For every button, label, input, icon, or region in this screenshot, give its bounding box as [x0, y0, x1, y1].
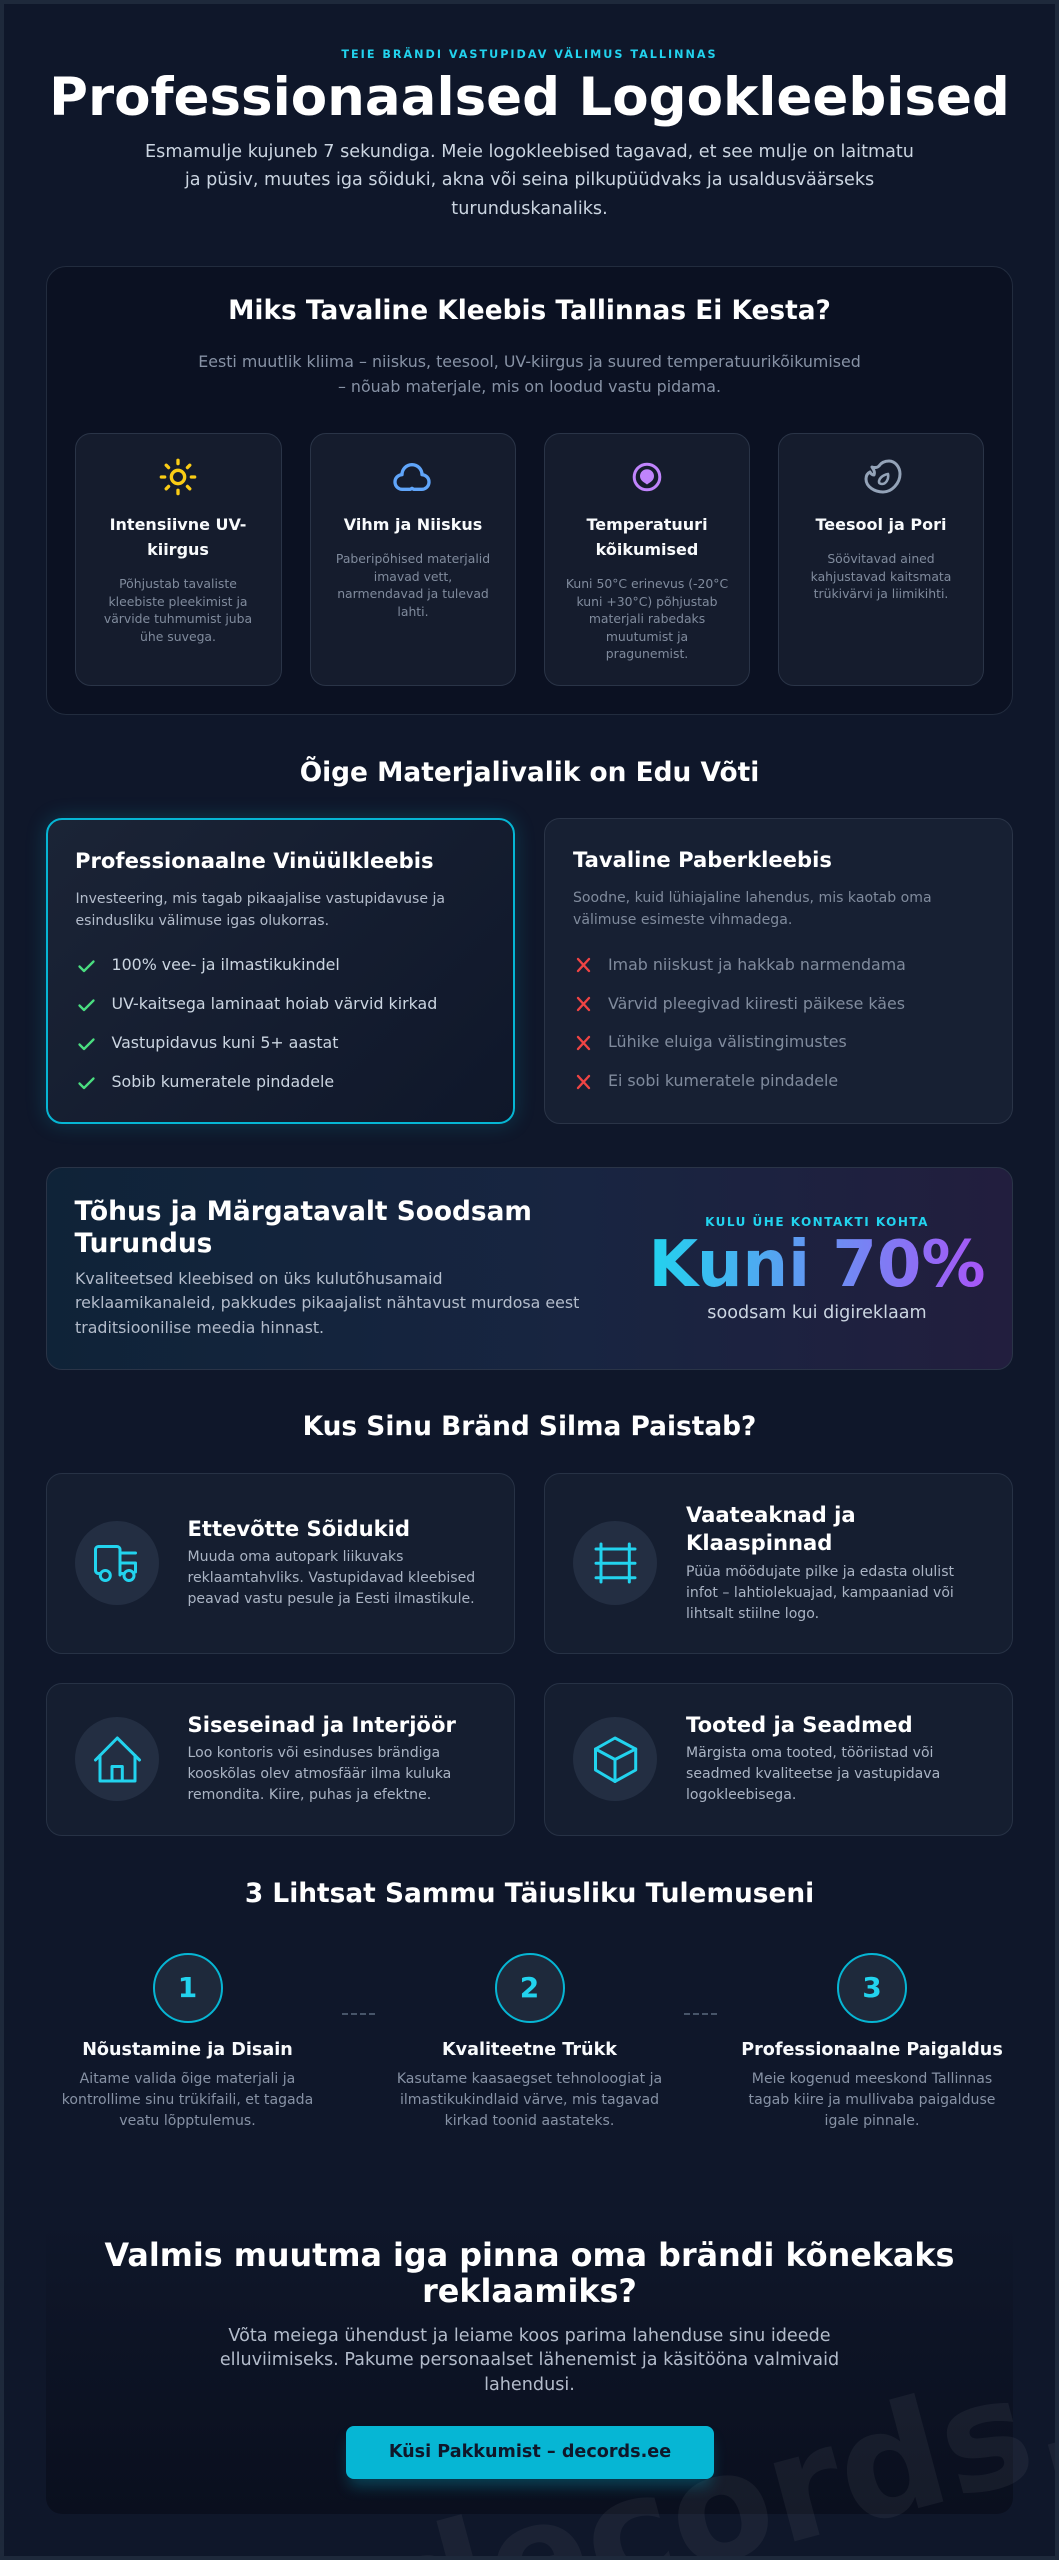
card: rain	[310, 433, 516, 686]
intro text: ja püsiv, muutes iga sõiduki, akna või seina pilkupüüdvaks ja usaldusväärseks	[185, 170, 874, 190]
section heading: materials: Õige Materjalivalik on Edu Võti	[300, 756, 759, 788]
card text	[188, 1744, 451, 1803]
panel: why ordinary stickers fail	[46, 266, 1013, 715]
card text: Püüa möödujate pilke ja edasta olulist	[686, 1564, 954, 1580]
paper heading: Tavaline Paberkleebis	[573, 847, 832, 872]
card text: Loo kontoris või esinduses brändiga	[188, 1744, 440, 1760]
card text: peavad vastu pesule ja Eesti ilmastikule.	[188, 1591, 475, 1607]
card text: UV: kleebiste pleekimist ja	[108, 594, 248, 609]
card text: infot – lahtiolekuajad, kampaaniad või	[686, 1585, 954, 1601]
list text 1: Imab niiskust ja hakkab narmendama	[608, 955, 906, 974]
vinyl heading: Professionaalne Vinüülkleebis	[75, 848, 434, 873]
step 2 number: 2	[520, 1971, 539, 2004]
banner text	[75, 1268, 579, 1337]
CTA button	[346, 2426, 714, 2479]
intro text	[145, 142, 914, 219]
cross item 1	[576, 958, 590, 972]
CTA button: Küsi Pakkumist – decords.ee	[389, 2442, 671, 2462]
paper text: välimuse esimeste vihmadega.	[573, 912, 792, 928]
paper text	[573, 890, 932, 928]
list text 3: Lühike eluiga välistingimustes	[608, 1032, 847, 1051]
card text: UV	[104, 576, 252, 644]
connector 2	[684, 2013, 717, 2015]
card text: UV: Põhjustab tavaliste	[119, 576, 237, 591]
CTA text: lahendusi.	[484, 2375, 575, 2395]
cross item 4	[576, 1074, 590, 1090]
connector 1	[342, 2013, 375, 2015]
section heading: where: Kus Sinu Bränd Silma Paistab?	[303, 1411, 756, 1442]
CTA heading: reklaamiks?	[422, 2273, 637, 2310]
cross item 2	[576, 996, 590, 1012]
card text: rain: imavad vett,	[374, 569, 452, 584]
step 3 text	[702, 2068, 1042, 2132]
stat value: Kuni 70%	[648, 1228, 986, 1302]
stat label: KULU ÜHE KONTAKTI KOHTA	[705, 1215, 929, 1229]
card title: UV: kiirgus	[147, 540, 209, 558]
icon: house	[94, 1736, 142, 1782]
banner heading: Turundus	[74, 1228, 212, 1258]
CTA text: elluviimiseks. Pakume personaalset lähenemist ja käsitööna valmivaid	[220, 2350, 839, 2370]
step 1 title: Nõustamine ja Disain	[82, 2040, 293, 2060]
card: products	[544, 1682, 1013, 1836]
CTA heading: Valmis muutma iga pinna oma brändi kõnekaks	[105, 2237, 954, 2274]
card text	[686, 1564, 954, 1622]
list text 4: Sobib kumeratele pindadele	[112, 1072, 334, 1091]
card text	[188, 1548, 475, 1607]
step 1 text: Aitame valida õige materjali ja	[80, 2070, 295, 2086]
CTA text: Võta meiega ühendust ja leiame koos parima lahenduse sinu ideede	[228, 2326, 831, 2346]
icon: sun	[160, 458, 196, 496]
banner heading	[74, 1196, 532, 1258]
title: Professionaalsed Logokleebised	[49, 67, 1010, 128]
icon: box	[594, 1736, 638, 1783]
stat caption: soodsam kui digireklaam	[707, 1303, 927, 1323]
icon circle	[573, 1717, 657, 1801]
card: vehicles	[46, 1472, 515, 1654]
card title: UV	[110, 514, 246, 558]
panel: vinyl	[46, 818, 515, 1124]
vinyl text	[76, 891, 445, 929]
card text: rain: lahti.	[397, 604, 429, 619]
step 3 text: tagab kiire ja mullivaba paigalduse	[749, 2092, 995, 2108]
list text 2: Värvid pleegivad kiiresti päikese käes	[608, 994, 905, 1012]
card: UV	[75, 433, 282, 686]
step 3 number	[837, 1953, 907, 2023]
banner text: traditsioonilise meedia hinnast.	[75, 1318, 324, 1337]
list text 3: Vastupidavus kuni 5+ aastat	[112, 1033, 338, 1052]
icon circle	[75, 1521, 159, 1605]
card text: road salt: Söövitavad ained	[827, 551, 935, 566]
card text: seadmed kvaliteetse ja vastupidava	[686, 1766, 940, 1782]
card text: logokleebisega.	[686, 1787, 796, 1803]
card title: UV: Intensiivne UV-	[110, 514, 246, 534]
card text: temperature: pragunemist.	[606, 646, 688, 661]
card text: road salt: trükivärvi ja liimikihti.	[814, 586, 948, 601]
card text: temperature: kuni +30°C) põhjustab	[576, 594, 718, 609]
icon: corrosion	[864, 460, 902, 494]
step 1 text	[62, 2070, 313, 2129]
banner heading: Tõhus ja Märgatavalt Soodsam	[74, 1196, 532, 1227]
check item 2	[78, 999, 95, 1012]
icon circle	[573, 1521, 657, 1605]
cross item 3	[576, 1036, 590, 1050]
list text 4: Ei sobi kumeratele pindadele	[608, 1071, 838, 1090]
card text: rain	[336, 551, 490, 619]
card text: UV: ühe suvega.	[140, 629, 216, 644]
card title: road salt: Teesool ja Pori	[816, 514, 946, 534]
eyebrow: TEIE BRÄNDI VASTUPIDAV VÄLIMUS TALLINNAS	[341, 48, 718, 61]
check item 1	[78, 960, 95, 972]
card text: temperature	[566, 576, 728, 661]
list text 2: UV-kaitsega laminaat hoiab värvid kirkad	[112, 994, 437, 1013]
card text: remondita. Kiire, puhas ja efektne.	[188, 1787, 431, 1803]
card text: kooskõlas olev atmosfäär ilma kuluka	[188, 1766, 451, 1782]
cross list: paper	[576, 955, 906, 1090]
list text 1: 100% vee- ja ilmastikukindel	[112, 955, 340, 974]
CTA heading	[0, 2238, 1059, 2310]
step 1 text: veatu lõpptulemus.	[119, 2113, 256, 2129]
intro text: Esmamulje kujuneb 7 sekundiga. Meie logokleebised tagavad, et see mulje on laitmatu	[145, 142, 914, 162]
check item 3	[78, 1038, 95, 1050]
check item 4	[78, 1077, 95, 1090]
card text: temperature: Kuni 50°C erinevus (-20°C	[566, 576, 728, 591]
step 1 text: kontrollime sinu trükifaili, et tagada	[62, 2092, 313, 2108]
vinyl text: esindusliku välimuse igas olukorras.	[76, 913, 329, 929]
card text: road salt	[811, 551, 951, 601]
card: road salt	[778, 433, 984, 686]
step 2 text: Kasutame kaasaegset tehnoloogiat ja	[397, 2070, 662, 2086]
card title: Tooted ja Seadmed	[686, 1712, 913, 1737]
step 2 text: kirkad toonid aastateks.	[445, 2113, 614, 2129]
card title: temperature	[586, 514, 708, 558]
card title: temperature: kõikumised	[596, 540, 698, 558]
panel intro	[198, 352, 861, 396]
panel heading: Miks Tavaline Kleebis Tallinnas Ei Kesta?	[228, 295, 831, 326]
panel intro: Eesti muutlik kliima – niiskus, teesool, UV-kiirgus ja suured temperatuurikõikumised	[198, 352, 861, 370]
vinyl text: Investeering, mis tagab pikaajalise vastupidavuse ja	[76, 891, 445, 907]
step 2 text: ilmastikukindlaid värve, mis tagavad	[400, 2092, 659, 2108]
card text: temperature: muutumist ja	[606, 629, 688, 644]
step 3 text: igale pinnale.	[825, 2113, 919, 2129]
CTA text	[0, 2324, 1059, 2397]
card text: rain: Paberipõhised materjalid	[336, 551, 490, 566]
card text: lihtsalt stiilne logo.	[686, 1606, 819, 1622]
section heading: steps: 3 Lihtsat Sammu Täiusliku Tulemuseni	[245, 1878, 814, 1909]
panel: call to action	[46, 2220, 1013, 2514]
card text: Märgista oma tooted, tööriistad või	[686, 1744, 933, 1760]
card title: Ettevõtte Sõidukid	[188, 1516, 410, 1541]
icon: temperature	[632, 462, 662, 492]
step 3 number: 3	[862, 1971, 882, 2004]
card text: Muuda oma autopark liikuvaks	[188, 1548, 403, 1564]
step 2 title: Kvaliteetne Trükk	[442, 2040, 617, 2060]
step 3 text: Meie kogenud meeskond Tallinnas	[752, 2070, 992, 2086]
icon: truck	[94, 1545, 137, 1582]
step 1 number: 1	[178, 1971, 197, 2004]
card title: Klaaspinnad	[686, 1530, 832, 1555]
banner text: reklaamikanaleid, pakkudes pikaajalist nähtavust murdosa eest	[75, 1293, 579, 1312]
banner text: Kvaliteetsed kleebised on üks kulutõhusamaid	[75, 1268, 443, 1288]
step 3 title: Professionaalne Paigaldus	[741, 2040, 1003, 2060]
panel: cost banner	[46, 1167, 1013, 1370]
icon: cloud	[393, 463, 431, 491]
card text: UV: värvide tuhmumist juba	[104, 611, 252, 626]
panel intro: – nõuab materjale, mis on loodud vastu pidama.	[338, 376, 721, 396]
card text: reklaamtahvliks. Vastupidavad kleebised	[188, 1570, 475, 1586]
check list: vinyl	[78, 955, 437, 1091]
card title: temperature: Temperatuuri	[586, 514, 708, 534]
paper text: Soodne, kuid lühiajaline lahendus, mis kaotab oma	[573, 890, 932, 906]
card title: rain: Vihm ja Niiskus	[344, 514, 482, 534]
step 1 number	[152, 1953, 222, 2023]
card text: road salt: kahjustavad kaitsmata	[811, 569, 951, 584]
panel: paper	[544, 818, 1013, 1124]
card text	[686, 1744, 940, 1803]
icon circle	[75, 1717, 159, 1801]
step 2 text	[397, 2070, 662, 2129]
intro text: turunduskanaliks.	[451, 199, 608, 219]
card: windows	[544, 1472, 1013, 1654]
card text: rain: narmendavad ja tulevad	[337, 586, 489, 601]
step 2 number	[494, 1953, 564, 2023]
card text: temperature: materjali rabedaks	[589, 611, 705, 626]
card: interior	[46, 1682, 515, 1836]
card title: Siseseinad ja Interjöör	[188, 1712, 456, 1737]
card title: Vaateaknad ja	[686, 1502, 856, 1527]
card: temperature	[544, 433, 750, 686]
card title	[686, 1502, 856, 1555]
icon: window grid	[594, 1542, 636, 1584]
